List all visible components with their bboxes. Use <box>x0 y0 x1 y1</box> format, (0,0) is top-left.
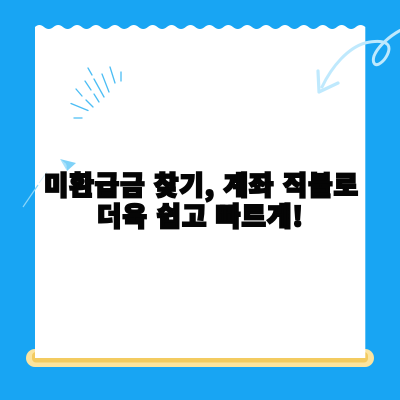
title <box>44 164 358 234</box>
icon: paper plane with dashed trail <box>23 159 76 207</box>
icon: curly arrow <box>318 30 400 92</box>
yellow paper holder bar <box>26 349 374 367</box>
title line 1: 미환급금 찾기, 계좌 직불로 <box>44 164 358 203</box>
icon: sunburst rays <box>71 67 121 118</box>
white paper with scalloped top edge <box>35 25 365 358</box>
title line 2: 더욱 쉽고 빠르게! <box>97 195 303 234</box>
